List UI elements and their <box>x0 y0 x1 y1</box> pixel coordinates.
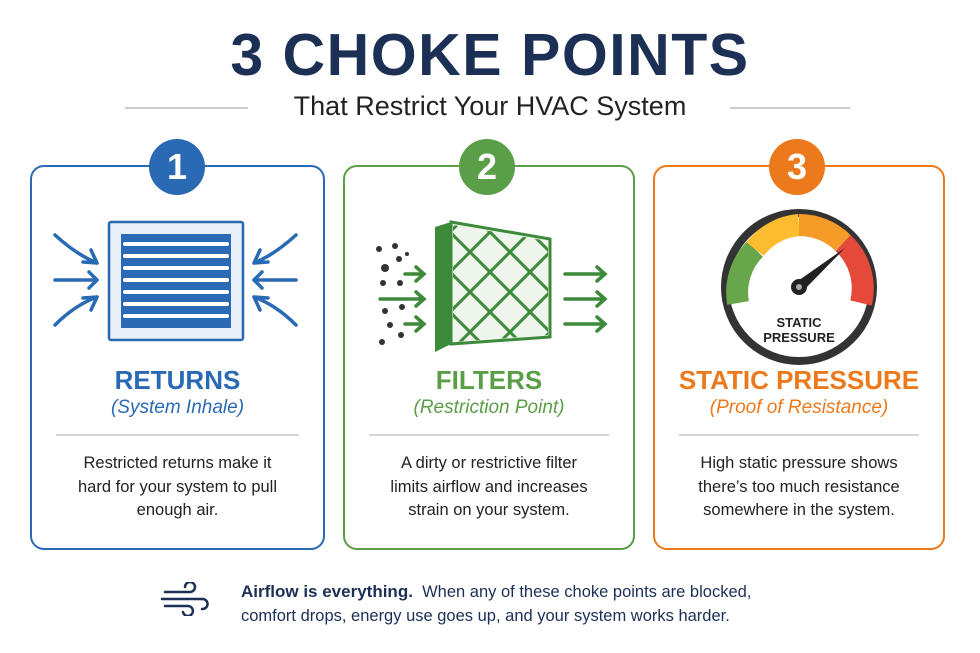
text: static pressure: there’s too much resistance <box>698 478 900 496</box>
badge 2: 2 <box>477 146 497 187</box>
badge 1 <box>149 139 205 195</box>
subheading: (System Inhale) <box>111 397 244 418</box>
badge 1: 1 <box>167 146 187 187</box>
icon: gauge <box>721 209 877 365</box>
icon: return grille with arrows <box>53 220 298 342</box>
subtitle: That Restrict Your HVAC System <box>294 91 686 121</box>
text: static pressure <box>698 454 900 519</box>
heading: returns: RETURNS <box>115 365 240 395</box>
badge 2 <box>459 139 515 195</box>
text: static pressure: somewhere in the system. <box>703 501 895 519</box>
callout: bottom message: Airflow is everything. When any of these choke points are blocked, <box>241 582 751 601</box>
icon: wind <box>160 582 209 616</box>
text: returns: hard for your system to pull <box>78 478 277 496</box>
subheading: (Proof of Resistance) <box>710 397 888 418</box>
text: returns: Restricted returns make it <box>84 454 271 472</box>
icon: gauge: PRESSURE <box>763 330 835 345</box>
badge 3: 3 <box>787 146 807 187</box>
text: returns <box>78 454 277 519</box>
text: filters <box>390 454 588 519</box>
text: static pressure: High static pressure shows <box>700 454 898 472</box>
icon: gauge: STATIC <box>776 315 822 330</box>
heading: filters: FILTERS <box>436 365 542 395</box>
callout: bottom message: comfort drops, energy use goes up, and your system works harder. <box>241 607 730 625</box>
text: returns: enough air. <box>137 501 218 519</box>
text: filters: A dirty or restrictive filter <box>401 454 577 472</box>
panel: static pressure <box>653 165 945 550</box>
icon: filter <box>376 220 608 352</box>
title: 3 CHOKE POINTS <box>230 22 750 88</box>
text: filters: strain on your system. <box>408 501 570 519</box>
callout: bottom message <box>241 582 751 625</box>
panel: returns <box>30 165 325 550</box>
panel: filters <box>343 165 635 550</box>
subheading: (Restriction Point) <box>414 397 564 418</box>
text: filters: limits airflow and increases <box>390 478 588 496</box>
heading: static pressure: STATIC PRESSURE <box>679 365 919 395</box>
badge 3 <box>769 139 825 195</box>
